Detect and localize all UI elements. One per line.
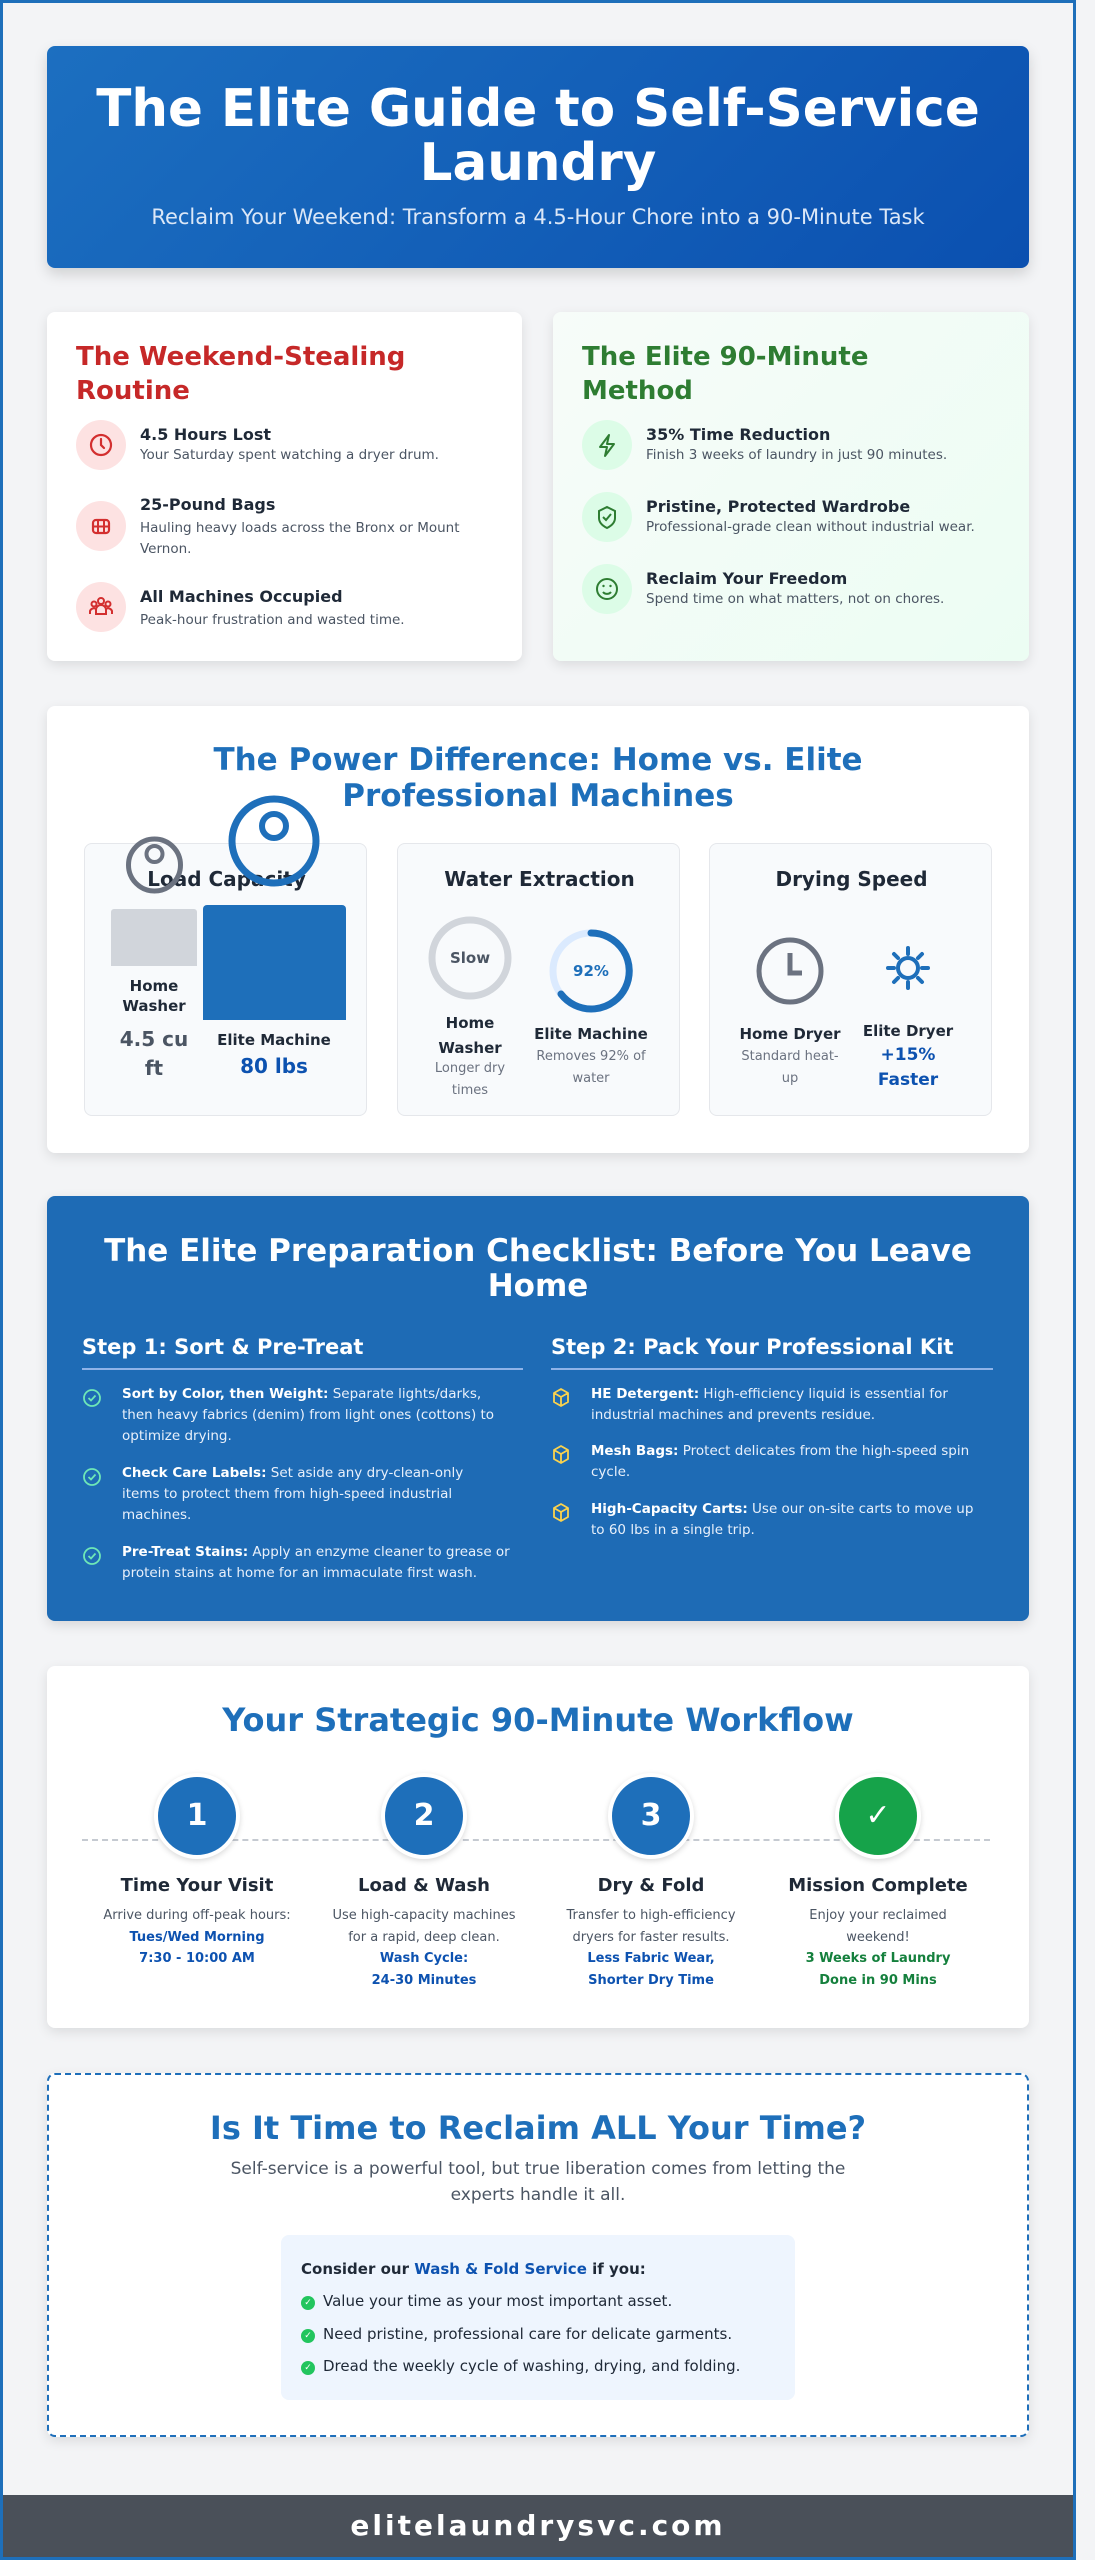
heading: The Elite 90-Minute xyxy=(582,342,868,372)
step 1: Arrive during off-peak hours: xyxy=(103,1908,291,1923)
column: step 1: Pre-Treat Stains: Apply an enzyme cleaner to grease or protein stains at home for an immaculate first wash. xyxy=(122,1544,510,1581)
heading: Method xyxy=(582,376,693,406)
step 2: Wash Cycle: xyxy=(380,1951,468,1966)
subpanel: drying speed: Home Dryer xyxy=(739,1025,841,1043)
heading xyxy=(104,1233,972,1304)
column: step 2: HE Detergent: High-efficiency liquid is essential for industrial machines and prevents residue. xyxy=(591,1386,948,1423)
item: care labels xyxy=(83,1465,463,1523)
callout: wash & fold: Consider our Wash & Fold Service if you: xyxy=(301,2260,646,2278)
subpanel: drying speed: Faster xyxy=(878,1070,938,1090)
panel: workflow xyxy=(47,1666,1029,2028)
column: step 2: High-Capacity Carts: Use our on-site carts to move up to 60 lbs in a single trip. xyxy=(591,1501,973,1538)
icon: box xyxy=(553,1445,569,1464)
subtitle: Reclaim Your Weekend: Transform a 4.5-Hour Chore into a 90-Minute Task xyxy=(151,205,925,229)
bar: home washer xyxy=(111,909,197,966)
step 2: 2 xyxy=(414,1798,434,1833)
item: wardrobe: Pristine, Protected Wardrobe xyxy=(646,497,910,516)
title: Laundry xyxy=(420,133,656,193)
column: step 2 xyxy=(551,1335,993,1538)
item: freedom: Reclaim Your Freedom xyxy=(646,569,847,588)
subpanel: water extraction: Water Extraction xyxy=(444,867,635,891)
icon: 92% ring xyxy=(550,930,633,1012)
heading: Home xyxy=(488,1268,588,1304)
item: freedom: Spend time on what matters, not on chores. xyxy=(646,591,944,607)
heading xyxy=(582,342,868,406)
item: machines occupied: Peak-hour frustration and wasted time. xyxy=(140,612,405,628)
subpanel: load capacity: Home xyxy=(130,977,178,995)
column: step 2: Mesh Bags: Protect delicates from the high-speed spin cycle. xyxy=(591,1443,969,1480)
subpanel: drying speed: Elite Dryer xyxy=(863,1022,953,1040)
item: bags xyxy=(76,495,460,557)
icon: check circle xyxy=(83,1547,101,1565)
subpanel: water extraction: Elite Machine xyxy=(534,1025,648,1043)
subpanel: water extraction: Washer xyxy=(438,1039,502,1057)
icon: smile xyxy=(582,564,632,614)
item: hours lost: Your Saturday spent watching a dryer drum. xyxy=(140,447,439,463)
icon: check circle xyxy=(83,1389,101,1407)
subpanel: drying speed: +15% xyxy=(881,1045,935,1065)
heading: Load Capacity xyxy=(147,867,306,891)
icon: elite machine xyxy=(228,796,320,886)
step 4: Mission Complete xyxy=(788,1875,968,1896)
item: wardrobe: Professional-grade clean without industrial wear. xyxy=(646,519,975,535)
step 3: Less Fabric Wear, xyxy=(587,1951,715,1966)
item: bags: Hauling heavy loads across the Bronx or Mount Vernon. xyxy=(140,520,460,557)
subpanel: drying speed: Drying Speed xyxy=(775,867,928,891)
subpanel: water extraction xyxy=(397,843,680,1116)
icon: box xyxy=(553,1388,569,1407)
heading: Is It Time to Reclaim ALL Your Time? xyxy=(210,2109,866,2147)
step 1: 7:30 - 10:00 AM xyxy=(139,1951,255,1966)
column: step 1: Sort by Color, then Weight: Separate lights/darks, then heavy fabrics (denim) from light ones (cottons) to optimize drying. xyxy=(122,1386,494,1444)
subpanel: water extraction: Removes 92% of xyxy=(536,1049,646,1064)
step 2: Load & Wash xyxy=(358,1875,490,1896)
step 3: 3 xyxy=(641,1798,661,1833)
header xyxy=(47,46,1029,268)
heading: Routine xyxy=(76,376,190,406)
heading xyxy=(76,342,405,406)
panel: call to action xyxy=(47,2073,1029,2437)
title xyxy=(96,79,980,193)
step 3 xyxy=(566,1777,736,1988)
icon: bolt xyxy=(582,420,632,470)
item: carts xyxy=(553,1501,973,1538)
bar: elite machine xyxy=(203,905,346,1020)
step 4: weekend! xyxy=(846,1930,910,1944)
subpanel: drying speed xyxy=(709,843,992,1116)
icon: slow ring: Slow xyxy=(450,949,490,967)
heading: Your Strategic 90-Minute Workflow xyxy=(222,1701,854,1739)
title: The Elite Guide to Self-Service xyxy=(96,79,980,139)
step 4: Enjoy your reclaimed xyxy=(809,1908,947,1923)
icon: clock xyxy=(756,938,824,1004)
heading: The Power Difference: Home vs. Elite xyxy=(213,742,863,778)
icon: sun xyxy=(886,946,930,990)
icon: check circle xyxy=(83,1468,101,1486)
item: wardrobe xyxy=(582,492,975,542)
panel: elite 90-minute method xyxy=(553,312,1029,661)
text block: Self-service is a powerful tool, but true liberation comes from letting the experts handle it all. xyxy=(231,2159,845,2205)
icon: box xyxy=(553,1503,569,1522)
callout: wash & fold: ✓ xyxy=(304,2331,312,2341)
step 1: Time Your Visit xyxy=(121,1875,273,1896)
callout: wash & fold: Value your time as your most important asset. xyxy=(323,2292,672,2310)
item: time reduction: 35% Time Reduction xyxy=(646,425,830,444)
subpanel: water extraction: water xyxy=(572,1071,610,1086)
item: hours lost xyxy=(76,420,439,470)
subpanel: load capacity: 80 lbs xyxy=(240,1054,308,1078)
step 1: Tues/Wed Morning xyxy=(129,1930,265,1944)
heading: The Weekend-Stealing xyxy=(76,342,405,372)
item: machines occupied xyxy=(76,582,405,632)
subpanel: water extraction: Home xyxy=(446,1014,494,1032)
column: step 1: Step 1: Sort & Pre-Treat xyxy=(82,1335,363,1359)
column: step 1: Check Care Labels: Set aside any dry-clean-only items to protect them from high-speed industrial machines. xyxy=(122,1465,463,1523)
step 4: 3 Weeks of Laundry xyxy=(806,1951,950,1966)
icon: people xyxy=(76,582,126,632)
step 1: 1 xyxy=(187,1798,207,1833)
heading xyxy=(213,742,863,814)
callout: wash & fold: ✓ xyxy=(304,2363,312,2373)
subpanel: drying speed: Standard heat- xyxy=(741,1049,839,1064)
icon: 92% ring: 92% xyxy=(573,962,609,980)
subpanel: water extraction: times xyxy=(452,1083,488,1098)
subpanel: load capacity: Washer xyxy=(122,997,186,1015)
step 2: Use high-capacity machines for a rapid, deep clean. xyxy=(332,1908,516,1944)
item: hours lost: 4.5 Hours Lost xyxy=(140,425,271,444)
step 3: Dry & Fold xyxy=(598,1875,704,1896)
icon: bag xyxy=(76,501,126,551)
item: pre-treat xyxy=(83,1544,510,1581)
step 1 xyxy=(103,1777,291,1966)
column: step 2: Step 2: Pack Your Professional Kit xyxy=(551,1335,953,1359)
item: detergent xyxy=(553,1386,948,1423)
icon: slow ring xyxy=(428,916,512,1000)
callout: wash & fold: ✓ xyxy=(304,2298,312,2308)
subpanel: load capacity: Elite Machine xyxy=(217,1031,331,1049)
step 4 xyxy=(788,1777,968,1988)
step 2: 24-30 Minutes xyxy=(372,1972,476,1988)
footer xyxy=(3,2495,1073,2557)
item: bags: 25-Pound Bags xyxy=(140,495,275,514)
subpanel: drying speed: up xyxy=(782,1071,798,1086)
footer: elitelaundrysvc.com xyxy=(350,2509,726,2542)
heading: The Elite Preparation Checklist: Before You Leave xyxy=(104,1233,972,1269)
subpanel: water extraction: Longer dry xyxy=(435,1061,505,1076)
step 2 xyxy=(332,1777,516,1988)
subpanel: load capacity: 4.5 cu xyxy=(120,1027,188,1051)
item: machines occupied: All Machines Occupied xyxy=(140,587,343,606)
step 3: Shorter Dry Time xyxy=(588,1972,714,1988)
step 3: Transfer to high-efficiency dryers for faster results. xyxy=(566,1908,736,1944)
subpanel: load capacity xyxy=(84,843,367,1116)
item: time reduction xyxy=(582,420,947,470)
item: time reduction: Finish 3 weeks of laundry in just 90 minutes. xyxy=(646,447,947,463)
panel: weekend-stealing routine xyxy=(47,312,522,661)
icon: clock xyxy=(76,420,126,470)
panel: preparation checklist xyxy=(47,1196,1029,1621)
callout: wash & fold xyxy=(281,2235,795,2400)
item: sort xyxy=(83,1386,494,1444)
icon: home washer xyxy=(126,836,183,894)
callout: wash & fold: Need pristine, professional care for delicate garments. xyxy=(323,2325,732,2343)
column: step 1 xyxy=(82,1335,523,1581)
heading: Professional Machines xyxy=(342,778,734,814)
panel: power difference xyxy=(47,706,1029,1153)
callout: wash & fold: Dread the weekly cycle of washing, drying, and folding. xyxy=(323,2357,740,2375)
item: freedom xyxy=(582,564,944,614)
step 4: Done in 90 Mins xyxy=(819,1972,937,1988)
icon: badge check xyxy=(582,492,632,542)
step 4: ✓ xyxy=(865,1798,891,1833)
item: mesh bags xyxy=(553,1443,969,1480)
subpanel: load capacity: ft xyxy=(145,1056,163,1080)
